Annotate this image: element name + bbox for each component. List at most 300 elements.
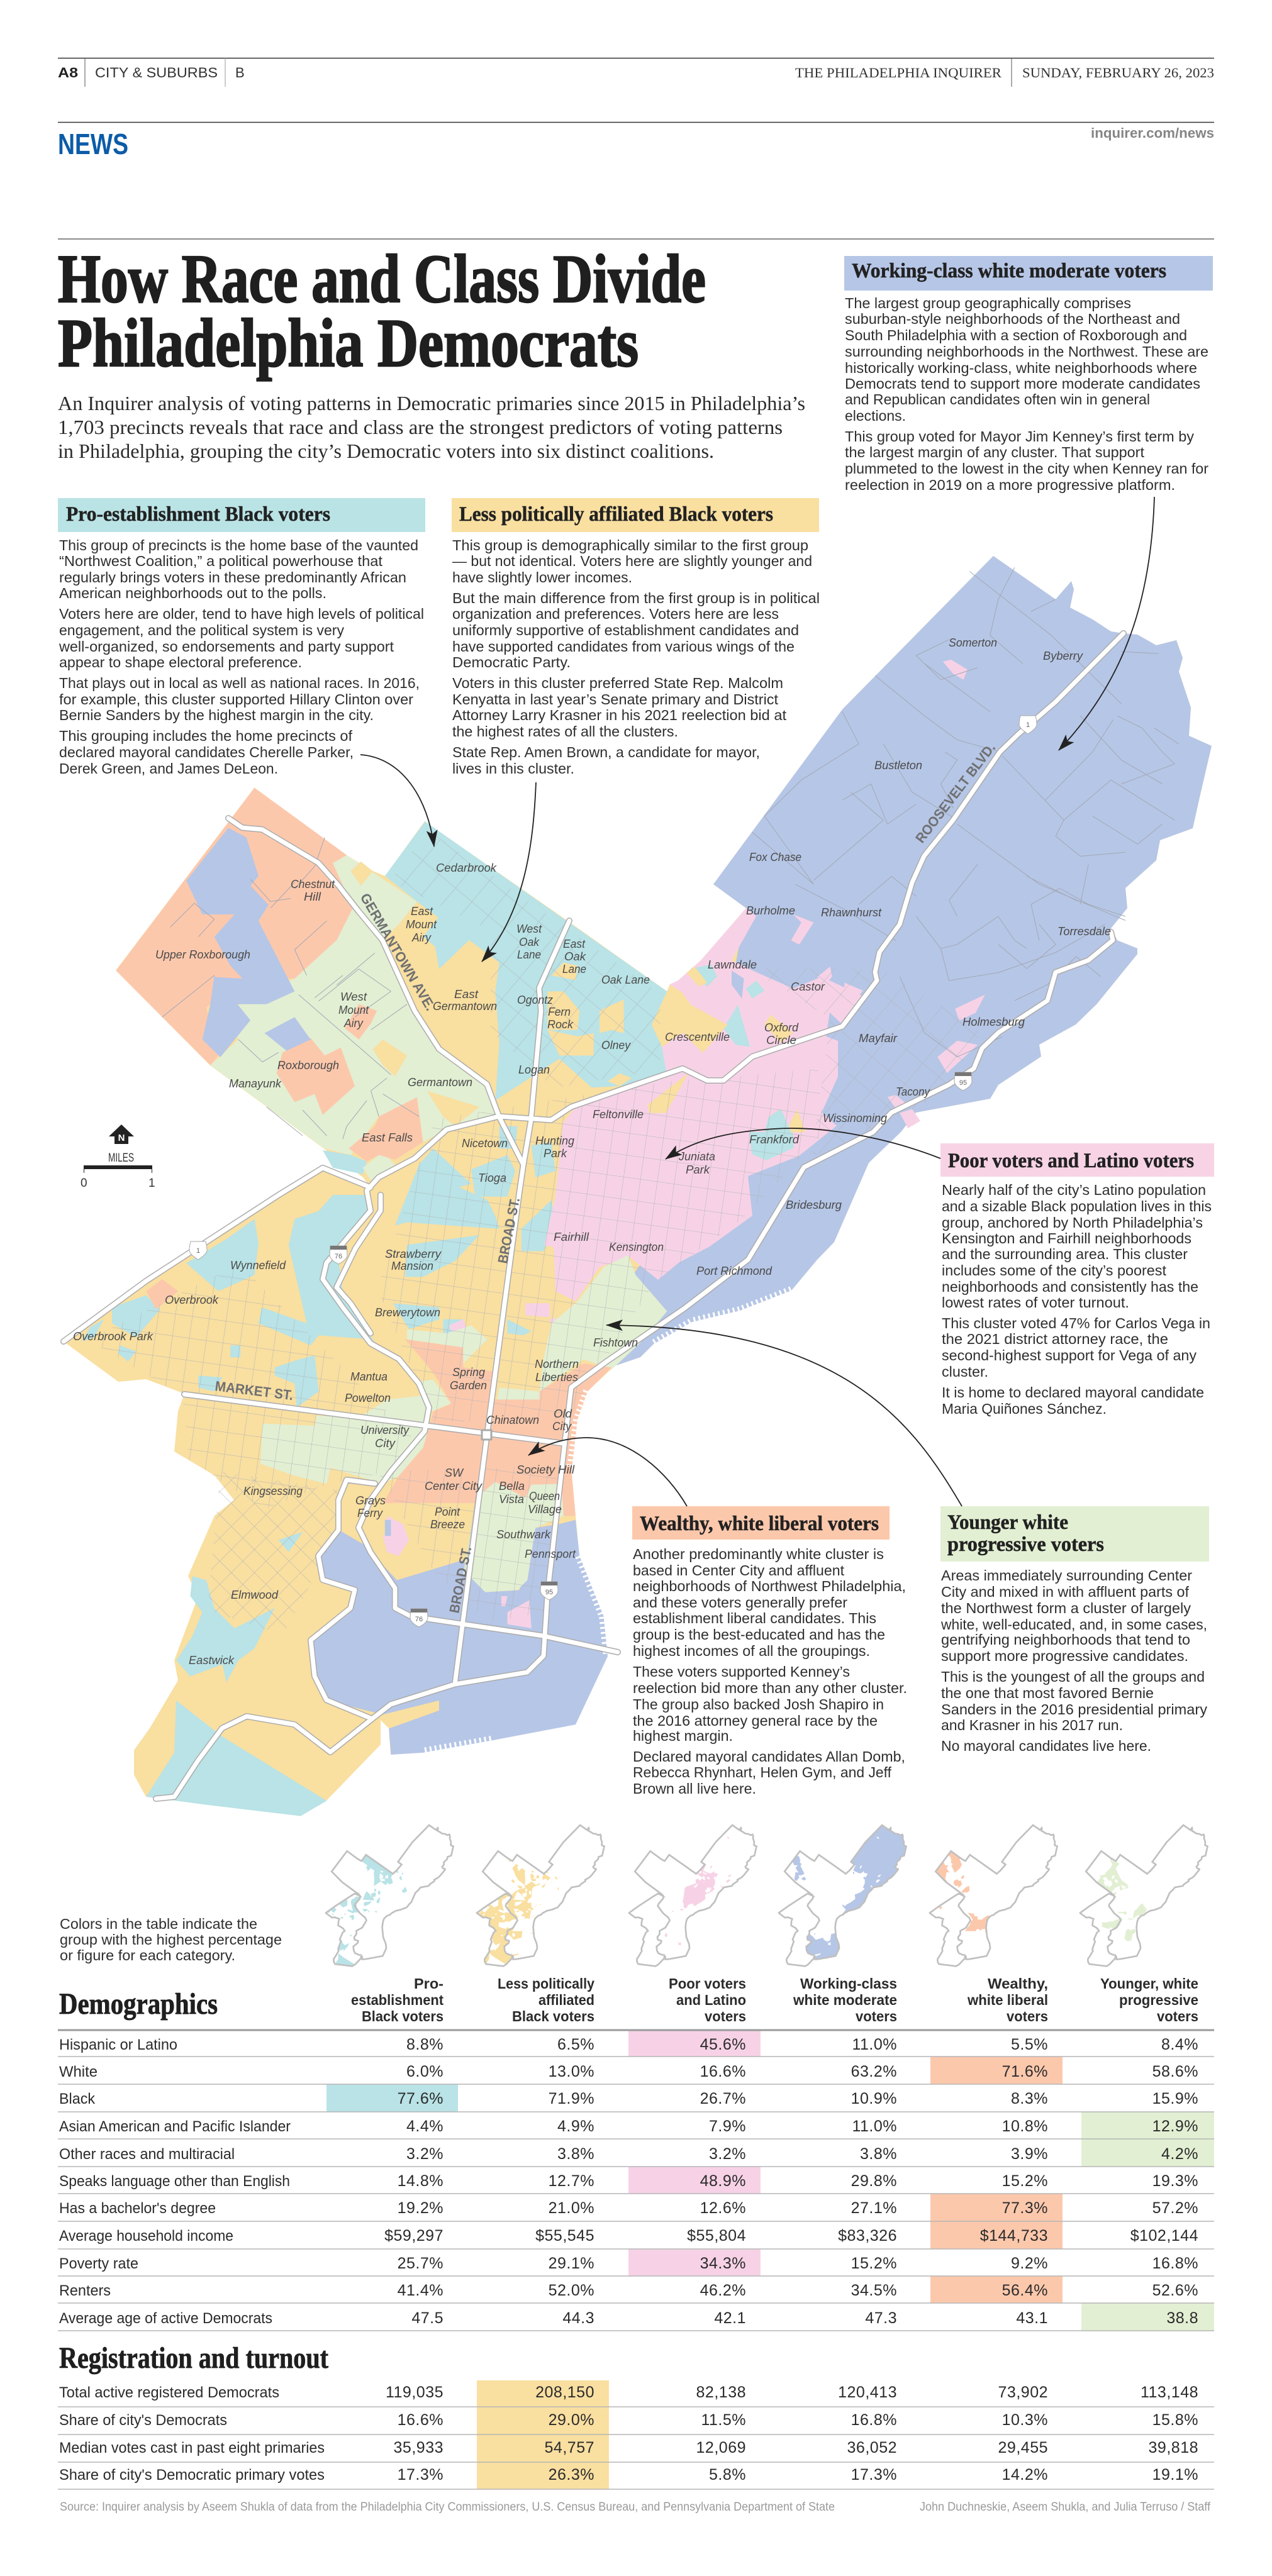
demographics table rows: 14.8% <box>398 2172 444 2190</box>
north arrow and scale bar: 1 <box>148 1177 155 1190</box>
panel: less politically affiliated Black voters: organization and preferences. Voters here are less <box>452 606 779 622</box>
table column headers: white liberal <box>967 1992 1048 2008</box>
neighborhood labels: University <box>360 1424 410 1436</box>
table column headers: and Latino <box>676 1992 746 2008</box>
demographics table rows: $144,733 <box>980 2227 1048 2245</box>
demographics table rows: 4.4% <box>406 2118 444 2135</box>
road labels: GERMANTOWN AVE. <box>357 891 438 1013</box>
panel: younger white progressive voters: City and mixed in with affluent parts of <box>941 1584 1190 1600</box>
demographics table rows: 8.3% <box>1011 2090 1048 2107</box>
road labels: ROOSEVELT BLVD. <box>912 740 998 846</box>
table column headers: Black voters <box>362 2008 444 2024</box>
region: working-class patches in the northwest <box>186 828 744 1536</box>
panel: less politically affiliated Black voters <box>452 498 820 777</box>
neighborhood labels: Rock <box>547 1018 574 1031</box>
neighborhood labels: Wissinoming <box>823 1112 887 1124</box>
north arrow and scale bar <box>81 1124 155 1190</box>
registration and turnout table rows: 17.3% <box>398 2466 444 2484</box>
demographics table rows: 48.9% <box>700 2172 746 2190</box>
panel: pro-establishment Black voters: Derek Green, and James DeLeon. <box>59 760 278 777</box>
demographics table rows: 12.7% <box>549 2172 594 2190</box>
neighborhood labels: Center City <box>425 1480 483 1492</box>
panel: less politically affiliated Black voters: Kenyatta in last year’s Senate primary and District <box>452 691 779 708</box>
neighborhood labels: Lane <box>517 948 541 961</box>
panel: less politically affiliated Black voters: lives in this cluster. <box>452 760 574 777</box>
panel: less politically affiliated Black voters: Less politically affiliated Black voters <box>459 503 773 526</box>
panel: wealthy, white liberal voters: Declared mayoral candidates Allan Domb, <box>633 1748 905 1765</box>
table column headers: Black voters <box>512 2008 594 2024</box>
demographics table rows: 11.0% <box>852 2118 897 2135</box>
demographics table rows: 41.4% <box>398 2282 444 2299</box>
registration and turnout table rows: 120,413 <box>838 2384 897 2401</box>
neighborhood labels: Feltonville <box>593 1108 644 1121</box>
neighborhood labels: Cedarbrook <box>436 862 497 874</box>
panel: less politically affiliated Black voters: State Rep. Amen Brown, a candidate for mayor, <box>452 744 760 760</box>
demographics table rows: 47.3 <box>865 2309 897 2327</box>
section flag: News: NEWS <box>58 128 128 160</box>
panel: working-class white moderate voters: The largest group geographically comprises <box>845 295 1131 311</box>
neighborhood labels: East Falls <box>362 1131 413 1144</box>
source line and credit: Source: Inquirer analysis by Aseem Shukla of data from the Philadelphia City Commissioners, U.S. Census Bureau, and Pennsylvania Department of State <box>60 2501 835 2514</box>
neighborhood labels: East <box>454 988 479 1001</box>
table highlight cells <box>326 2031 1214 2489</box>
panel: pro-establishment Black voters: for example, this cluster supported Hillary Clinton over <box>59 691 413 708</box>
panel: pro-establishment Black voters: declared mayoral candidates Cherelle Parker, <box>59 744 354 760</box>
table column headers: voters <box>1157 2008 1198 2024</box>
neighborhood labels: Kingsessing <box>243 1485 303 1497</box>
panel: poor voters and Latino voters: and a sizable Black population lives in this <box>942 1198 1212 1214</box>
registration and turnout heading: Registration and turnout <box>59 2341 328 2375</box>
panel: poor voters and Latino voters: second-highest support for Vega of any <box>942 1347 1197 1363</box>
mini map: wealthy, white liberal voters <box>930 1825 1057 1966</box>
demographics table rows: 8.8% <box>406 2036 444 2053</box>
demographics table rows: 10.9% <box>851 2090 897 2107</box>
panel: working-class white moderate voters: South Philadelphia with a section of Roxborough and <box>845 327 1187 343</box>
neighborhood labels: Germantown <box>433 1000 497 1013</box>
registration and turnout table rows: 16.6% <box>398 2411 444 2429</box>
panel: wealthy, white liberal voters: Brown all live here. <box>633 1780 756 1797</box>
panel: poor voters and Latino voters: neighborhoods and consistently has the <box>942 1279 1198 1295</box>
table column headers: voters <box>705 2008 746 2024</box>
table column headers: voters <box>1007 2008 1048 2024</box>
table column headers: progressive <box>1119 1992 1198 2008</box>
neighborhood labels: Rhawnhurst <box>821 906 882 919</box>
panel: younger white progressive voters: Younger white <box>947 1511 1068 1534</box>
panel: less politically affiliated Black voters: — but not identical. Voters here are slightly younger and <box>452 553 812 569</box>
panel: younger white progressive voters: progressive voters <box>947 1533 1104 1556</box>
neighborhood labels: Queen <box>529 1490 560 1502</box>
intro paragraph: in Philadelphia, grouping the city’s Democratic voters into six distinct coalitions. <box>58 440 714 462</box>
panel: younger white progressive voters: white, well-educated, and, in some cases, <box>940 1616 1207 1633</box>
registration and turnout table rows: Median votes cast in past eight primaries <box>59 2440 325 2457</box>
demographics table rows: 25.7% <box>398 2255 444 2272</box>
neighborhood labels: West <box>516 923 542 935</box>
registration and turnout table rows: 15.8% <box>1152 2411 1198 2429</box>
region: working-class white moderate voters <box>311 556 1212 1755</box>
registration and turnout table rows: Total active registered Democrats <box>59 2384 279 2401</box>
highway shields: 1 <box>196 1247 200 1255</box>
neighborhood labels: Olney <box>601 1039 631 1052</box>
registration and turnout table rows: 208,150 <box>535 2384 594 2401</box>
demographics table rows: 9.2% <box>1011 2255 1048 2272</box>
road labels: MARKET ST. <box>214 1378 294 1403</box>
precinct boundaries <box>88 567 1179 1635</box>
region: pro-establishment patches <box>691 965 794 1160</box>
panel: wealthy, white liberal voters: These voters supported Kenney’s <box>633 1663 850 1680</box>
neighborhood labels: Mantua <box>350 1370 388 1383</box>
road labels: BROAD ST. <box>494 1196 523 1265</box>
section flag: News <box>58 122 1214 239</box>
neighborhood labels: Breeze <box>430 1518 465 1531</box>
registration and turnout table rows: 12,069 <box>696 2439 746 2457</box>
neighborhood labels: Powelton <box>345 1392 391 1404</box>
registration and turnout table rows: 39,818 <box>1149 2439 1198 2457</box>
neighborhood labels: Southwark <box>496 1528 551 1541</box>
neighborhood labels: Hill <box>304 891 321 903</box>
neighborhood labels: City <box>552 1420 572 1433</box>
panel: poor voters and Latino voters: cluster. <box>942 1363 988 1380</box>
neighborhood labels: City <box>375 1437 396 1450</box>
section flag: News: inquirer.com/news <box>1091 125 1214 141</box>
neighborhood labels: Mansion <box>391 1260 433 1272</box>
demographics table rows: 12.6% <box>700 2199 746 2217</box>
neighborhood labels: Airy <box>343 1017 364 1030</box>
demographics table rows: 19.2% <box>398 2199 444 2217</box>
panel: younger white progressive voters: support more progressive candidates. <box>941 1648 1188 1664</box>
region: less politically affiliated patches <box>351 862 805 1132</box>
panel: younger white progressive voters: Sanders in the 2016 presidential primary <box>941 1701 1207 1718</box>
neighborhood labels: Brewerytown <box>375 1306 440 1319</box>
demographics table rows: 13.0% <box>549 2063 594 2080</box>
neighborhood labels: Society Hill <box>516 1463 575 1476</box>
registration and turnout table rows <box>59 2384 1198 2484</box>
demographics table rows: 3.8% <box>557 2145 594 2163</box>
neighborhood labels: Lawndale <box>708 958 757 971</box>
panel: working-class white moderate voters: and Republican candidates often win in general <box>845 391 1150 408</box>
demographics table rows: White <box>59 2063 98 2080</box>
demographics table rows: 27.1% <box>851 2199 897 2217</box>
panel: wealthy, white liberal voters: based in Center City and affluent <box>633 1562 845 1579</box>
panel: pro-establishment Black voters: Bernie Sanders by the highest margin in the city. <box>59 707 374 723</box>
neighborhood labels: Ogontz <box>517 994 553 1006</box>
neighborhood labels: Park <box>544 1147 567 1160</box>
neighborhood labels: Germantown <box>408 1076 472 1089</box>
registration and turnout table rows: 29,455 <box>998 2439 1048 2457</box>
registration and turnout table rows: 82,138 <box>696 2384 746 2401</box>
panel: less politically affiliated Black voters: This group is demographically similar to the first group <box>452 537 808 553</box>
neighborhood labels: Mount <box>338 1004 369 1016</box>
neighborhood labels: Circle <box>766 1034 796 1046</box>
panel: poor voters and Latino voters: Poor voters and Latino voters <box>948 1150 1194 1172</box>
neighborhood labels: Point <box>435 1506 460 1518</box>
demographics table rows: 77.6% <box>398 2090 444 2107</box>
table column headers: Wealthy, <box>988 1975 1048 1992</box>
demographics table rows: Average age of active Democrats <box>59 2310 272 2327</box>
panel: pro-establishment Black voters: That plays out in local as well as national races. In 2016, <box>59 675 420 691</box>
page header: folio line: SUNDAY, FEBRUARY 26, 2023 <box>1022 65 1214 80</box>
panel: wealthy, white liberal voters: Wealthy, white liberal voters <box>640 1513 879 1535</box>
registration and turnout table rows: 119,035 <box>386 2384 444 2401</box>
neighborhood labels: Chestnut <box>291 878 335 891</box>
demographics table rows: $59,297 <box>384 2227 444 2245</box>
intro paragraph: An Inquirer analysis of voting patterns in Democratic primaries since 2015 in Philadelphia’s <box>58 392 805 414</box>
demographics table rows: 8.4% <box>1161 2036 1198 2053</box>
neighborhood labels: Vista <box>499 1493 524 1506</box>
neighborhood labels: Crescentville <box>665 1031 730 1043</box>
demographics table rows: $102,144 <box>1130 2227 1198 2245</box>
demographics table rows: 43.1 <box>1016 2309 1048 2327</box>
demographics table rows: Poverty rate <box>59 2255 138 2272</box>
demographics table rows: 71.9% <box>549 2090 594 2107</box>
table rules <box>58 2030 1214 2489</box>
demographics table rows: 7.9% <box>709 2118 746 2135</box>
panel: poor voters and Latino voters: and the surrounding area. This cluster <box>942 1246 1188 1262</box>
title: Philadelphia Democrats <box>58 305 639 381</box>
registration and turnout table rows: 113,148 <box>1141 2384 1198 2401</box>
mini map: less politically affiliated Black voters <box>477 1825 605 1966</box>
neighborhood labels: Fox Chase <box>749 851 801 863</box>
panel: working-class white moderate voters: Working-class white moderate voters <box>852 260 1166 282</box>
panel: working-class white moderate voters <box>844 256 1213 493</box>
mini map: poor voters and Latino voters <box>629 1825 757 1966</box>
panel: less politically affiliated Black voters: Democratic Party. <box>452 654 571 670</box>
neighborhood labels: Oxford <box>764 1021 799 1034</box>
neighborhood labels: Fern <box>548 1006 571 1018</box>
panel: wealthy, white liberal voters: and these voters generally prefer <box>633 1594 847 1611</box>
demographics table rows: 4.9% <box>557 2118 594 2135</box>
panel: younger white progressive voters: This is the youngest of all the groups and <box>941 1668 1205 1685</box>
demographics table rows: 38.8 <box>1166 2309 1198 2327</box>
panel: wealthy, white liberal voters: reelection bid more than any other cluster. <box>633 1680 907 1696</box>
neighborhood labels: Bustleton <box>874 759 922 772</box>
panel: less politically affiliated Black voters: Attorney Larry Krasner in his 2021 reelection bid at <box>452 707 787 723</box>
panel: pro-establishment Black voters: engagement, and the political system is very <box>59 622 344 638</box>
neighborhood labels: Fairhill <box>554 1231 589 1243</box>
neighborhood labels: Strawberry <box>385 1248 442 1260</box>
page header: folio line: THE PHILADELPHIA INQUIRER <box>795 65 1001 80</box>
neighborhood labels: Somerton <box>949 636 997 649</box>
neighborhood labels: Oak <box>519 936 540 948</box>
neighborhood labels: Castor <box>791 980 825 993</box>
panel: wealthy, white liberal voters: The group also backed Josh Shapiro in <box>633 1696 884 1713</box>
panel: working-class white moderate voters: reelection in 2019 on a more progressive platform. <box>845 477 1175 493</box>
region: pro-establishment Black voters <box>82 821 667 1816</box>
neighborhood labels: Kensington <box>609 1241 664 1253</box>
panel: less politically affiliated Black voters: have supported candidates from various wings of the <box>452 638 795 655</box>
registration and turnout table rows: 16.8% <box>851 2411 897 2429</box>
demographics table rows: Speaks language other than English <box>59 2173 290 2190</box>
demographics table rows: 42.1 <box>714 2309 746 2327</box>
neighborhood labels: Nicetown <box>462 1137 508 1150</box>
panel: pro-establishment Black voters: well-organized, so endorsements and party support <box>59 638 394 655</box>
neighborhood labels: Elmwood <box>231 1589 279 1601</box>
table column headers: Less politically <box>498 1975 594 1992</box>
panel: less politically affiliated Black voters: the highest rates of all the clusters. <box>452 723 678 740</box>
demographics table rows: 6.0% <box>406 2063 444 2080</box>
mini map: working-class white moderate voters <box>779 1825 907 1966</box>
panel: younger white progressive voters: and Krasner in his 2017 run. <box>941 1717 1123 1733</box>
demographics table rows <box>59 2036 1198 2327</box>
neighborhood labels: East <box>411 905 433 918</box>
demographics table rows: Average household income <box>59 2228 233 2245</box>
intro paragraph: 1,703 precincts reveals that race and class are the strongest predictors of voting patterns <box>58 416 783 438</box>
demographics table rows: $83,326 <box>838 2227 897 2245</box>
neighborhood labels: Airy <box>411 931 432 944</box>
neighborhood labels: Byberry <box>1043 650 1083 662</box>
neighborhood labels: Roxborough <box>277 1059 339 1072</box>
demographics table rows: 58.6% <box>1152 2063 1198 2080</box>
panel: less politically affiliated Black voters: But the main difference from the first group is in political <box>452 590 820 606</box>
mini map: younger white progressive voters <box>1080 1825 1208 1966</box>
table column headers: Working-class <box>800 1975 897 1992</box>
neighborhood labels: Oak Lane <box>601 974 650 986</box>
panel: working-class white moderate voters: historically working-class, white neighborhoods where <box>845 360 1197 376</box>
panel: poor voters and Latino voters: It is home to declared mayoral candidate <box>942 1384 1204 1401</box>
demographics table rows: 34.3% <box>700 2255 746 2272</box>
panel: younger white progressive voters: Areas immediately surrounding Center <box>941 1567 1192 1584</box>
neighborhood labels: Overbrook Park <box>73 1330 153 1343</box>
panel: younger white progressive voters: No mayoral candidates live here. <box>941 1738 1151 1754</box>
demographics table rows: 4.2% <box>1161 2145 1198 2163</box>
demographics table rows: Renters <box>59 2282 111 2299</box>
neighborhood labels: Juniata <box>678 1150 715 1163</box>
demographics table rows: Has a bachelor's degree <box>59 2200 216 2217</box>
registration and turnout table rows: 11.5% <box>701 2411 746 2429</box>
neighborhood labels: Eastwick <box>189 1654 235 1667</box>
demographics table rows: 26.7% <box>700 2090 746 2107</box>
panel: less politically affiliated Black voters: have slightly lower incomes. <box>452 569 632 586</box>
panel: younger white progressive voters: gentrifying neighborhoods that tend to <box>941 1631 1190 1648</box>
table note: or figure for each category. <box>60 1947 235 1963</box>
demographics table rows: 19.3% <box>1152 2172 1198 2190</box>
demographics table rows: 12.9% <box>1152 2118 1198 2135</box>
intro paragraph <box>58 392 805 462</box>
panel: poor voters and Latino voters: lowest rates of voter turnout. <box>942 1294 1129 1311</box>
registration and turnout table rows: 5.8% <box>709 2466 746 2484</box>
panel: pro-establishment Black voters: “Northwest Coalition,” a political powerhouse that <box>59 553 383 569</box>
neighborhood labels: Tacony <box>896 1085 930 1098</box>
panel: working-class white moderate voters: This group voted for Mayor Jim Kenney’s first term by <box>845 428 1195 445</box>
panel: poor voters and Latino voters: Maria Quiñones Sánchez. <box>942 1401 1107 1417</box>
panel: working-class white moderate voters: suburban-style neighborhoods of the Northeast and <box>845 311 1180 327</box>
neighborhood labels: Mount <box>406 918 437 931</box>
panel: younger white progressive voters <box>940 1506 1209 1754</box>
neighborhood labels: Spring <box>452 1366 485 1379</box>
neighborhood labels: East <box>563 938 586 950</box>
registration and turnout table rows: Share of city's Democrats <box>59 2412 227 2429</box>
table column headers: affiliated <box>538 1992 594 2008</box>
demographics table rows: 52.6% <box>1152 2282 1198 2299</box>
demographics table rows: Other races and multiracial <box>59 2146 235 2163</box>
highway shields: 76 <box>335 1253 342 1260</box>
panel: wealthy, white liberal voters <box>632 1506 907 1797</box>
demographics table rows: 56.4% <box>1002 2282 1048 2299</box>
source line and credit: John Duchneskie, Aseem Shukla, and Julia Terruso / Staff <box>920 2501 1211 2514</box>
demographics table rows: 44.3 <box>562 2309 594 2327</box>
panel: pro-establishment Black voters: appear to shape electoral preference. <box>59 654 302 670</box>
panel: wealthy, white liberal voters: Rebecca Rhynhart, Helen Gym, and Jeff <box>633 1764 892 1780</box>
panel: pro-establishment Black voters: regularly brings voters in these predominantly African <box>59 569 406 586</box>
neighborhood labels: Pennsport <box>525 1548 576 1560</box>
neighborhood labels: Bridesburg <box>786 1199 842 1211</box>
demographics table rows: 34.5% <box>851 2282 897 2299</box>
registration and turnout table rows: 73,902 <box>998 2384 1048 2401</box>
panel: wealthy, white liberal voters: establishment liberal candidates. This <box>633 1610 876 1626</box>
neighborhood labels: Torresdale <box>1057 925 1111 938</box>
neighborhood labels: Grays <box>355 1494 386 1507</box>
neighborhood labels: Village <box>528 1503 562 1516</box>
roads and rivers <box>64 633 1124 1799</box>
demographics table rows: Hispanic or Latino <box>59 2036 177 2053</box>
demographics table rows: 46.2% <box>700 2282 746 2299</box>
table column headers: white moderate <box>793 1992 897 2008</box>
highway shields <box>189 716 1037 1627</box>
page header: folio line: CITY & SUBURBS <box>95 65 218 80</box>
road labels: BROAD ST. <box>446 1545 474 1614</box>
map of Philadelphia voter clusters <box>64 556 1212 1816</box>
registration and turnout table rows: 10.3% <box>1002 2411 1048 2429</box>
demographics table rows: $55,545 <box>535 2227 594 2245</box>
registration and turnout table rows: 35,933 <box>394 2439 444 2457</box>
page header: folio line: B <box>235 65 245 80</box>
demographics table rows: 45.6% <box>700 2036 746 2053</box>
mini map: pro-establishment Black voters <box>326 1825 454 1966</box>
panel: wealthy, white liberal voters: highest margin. <box>633 1728 733 1744</box>
neighborhood labels: Old <box>554 1407 572 1420</box>
demographics table rows: Black <box>59 2090 96 2107</box>
north arrow and scale bar: 0 <box>81 1177 87 1190</box>
demographics table rows: 29.8% <box>851 2172 897 2190</box>
region: younger white progressive voters <box>210 855 667 1592</box>
registration and turnout table rows: 29.0% <box>549 2411 594 2429</box>
panel: pro-establishment Black voters: Pro-establishment Black voters <box>66 503 330 526</box>
panel: pro-establishment Black voters: This grouping includes the home precincts of <box>59 728 353 744</box>
neighborhood labels: Overbrook <box>165 1294 219 1306</box>
panel: poor voters and Latino voters: the 2021 district attorney race, the <box>942 1331 1168 1347</box>
panel: wealthy, white liberal voters: the 2016 attorney general race by the <box>633 1713 878 1729</box>
panel: poor voters and Latino voters: This cluster voted 47% for Carlos Vega in <box>942 1315 1210 1331</box>
neighborhood labels: Lane <box>562 963 586 975</box>
panel: working-class white moderate voters: Democrats tend to support more moderate candidates <box>845 375 1200 392</box>
panel: poor voters and Latino voters: Nearly half of the city’s Latino population <box>942 1182 1206 1198</box>
registration and turnout table rows: 14.2% <box>1002 2466 1048 2484</box>
demographics table rows: 3.2% <box>709 2145 746 2163</box>
highway shields: 1 <box>1026 721 1030 729</box>
demographics table rows: 63.2% <box>851 2063 897 2080</box>
panel: less politically affiliated Black voters: uniformly supportive of establishment candidates and <box>452 622 799 638</box>
demographics table rows: 15.9% <box>1152 2090 1198 2107</box>
registration and turnout table rows: 26.3% <box>549 2466 594 2484</box>
demographics table rows: Asian American and Pacific Islander <box>59 2118 291 2135</box>
neighborhood labels: SW <box>445 1467 464 1479</box>
panel: pro-establishment Black voters: This group of precincts is the home base of the vaunted <box>59 537 418 553</box>
panel: younger white progressive voters: the Northwest form a cluster of largely <box>941 1600 1191 1616</box>
panel: working-class white moderate voters: surrounding neighborhoods in the Northwest. These are <box>845 343 1208 360</box>
neighborhood labels: Burholme <box>746 904 795 917</box>
page header: folio line: A8 <box>58 65 78 80</box>
neighborhood labels: Hunting <box>535 1135 574 1147</box>
neighborhood labels: Holmesburg <box>962 1016 1025 1028</box>
table note: Colors in the table indicate the <box>60 1916 257 1932</box>
neighborhood labels: West <box>340 991 367 1003</box>
highway shields: 76 <box>415 1616 423 1623</box>
page header: folio line <box>58 58 1214 87</box>
demographics table rows: 15.2% <box>851 2255 897 2272</box>
panel: poor voters and Latino voters <box>940 1143 1214 1417</box>
neighborhood labels: Tioga <box>478 1172 506 1184</box>
panel: wealthy, white liberal voters: Another predominantly white cluster is <box>633 1546 884 1562</box>
table column headers: voters <box>856 2008 897 2024</box>
